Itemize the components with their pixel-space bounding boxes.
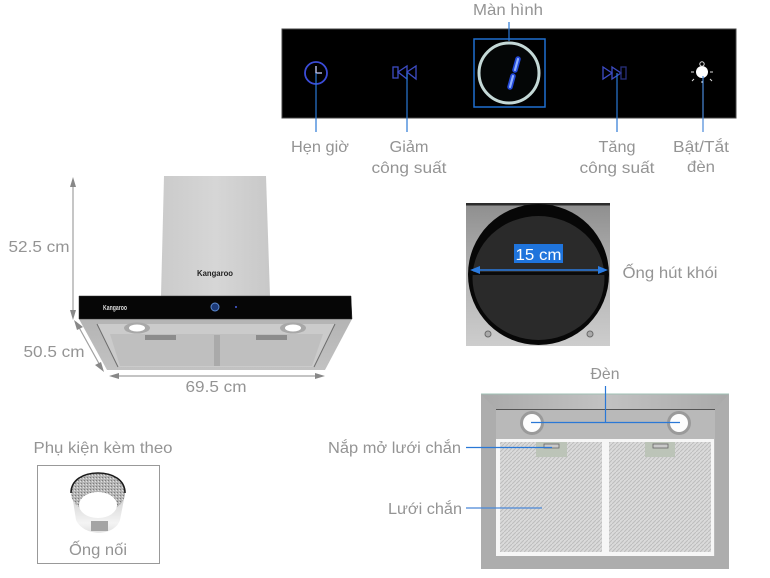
callout: Lưới chắn: Lưới chắn [388,499,462,518]
latch: left [536,442,567,457]
label: Hẹn giờ: Hẹn giờ [291,139,350,156]
filter: left mesh [500,442,602,552]
dimension: height [8,177,76,320]
label: Màn hình: Màn hình [473,2,543,19]
label: Ống nối: Ống nối [69,539,127,559]
heading: accessories: Phụ kiện kèm theo [34,440,173,457]
callout: Nắp mở lưới chắn: Nắp mở lưới chắn [328,438,461,457]
dimension: depth: 50.5 cm [24,344,84,361]
dimension: width: 69.5 cm [186,379,246,396]
label: Bật/Tắt đèn: Bật/Tắt [673,137,730,156]
dimension: width [109,373,325,396]
icon: increase power [603,67,626,132]
icon: connector pipe [71,473,125,533]
icon: display [474,22,545,107]
label: Giảm công suất: Giảm [390,139,428,156]
illustration: range hood: Kangaroo [197,269,233,278]
panel: accessories box [38,466,160,564]
label: Tăng công suất: Tăng [598,139,636,156]
icon: timer [305,62,327,132]
callout: Đèn: Đèn [590,366,620,383]
dimension: height: 52.5 cm [8,239,70,256]
dimension: depth [24,320,104,372]
photo: exhaust duct [466,203,610,346]
filter: right mesh [609,442,711,552]
lamp: right [667,411,691,435]
illustration: range hood: Kangaroo [103,305,127,312]
arrow: duct diameter [470,266,608,274]
icon: light toggle [691,62,713,132]
photo: hood underside [481,394,729,569]
label: Ống hút khói: Ống hút khói [622,262,718,282]
latch: right [645,442,675,457]
illustration: range hood [79,176,352,370]
label: đèn: đèn [687,159,715,176]
label: công suất (left): công suất [372,160,447,177]
badge: 15 cm: 15 cm [516,247,562,264]
icon: decrease power [393,66,416,132]
panel: control panel [282,2,736,177]
lamp: left [520,411,544,435]
label: công suất (right): công suất [580,160,655,177]
callout: Đèn [531,366,680,422]
